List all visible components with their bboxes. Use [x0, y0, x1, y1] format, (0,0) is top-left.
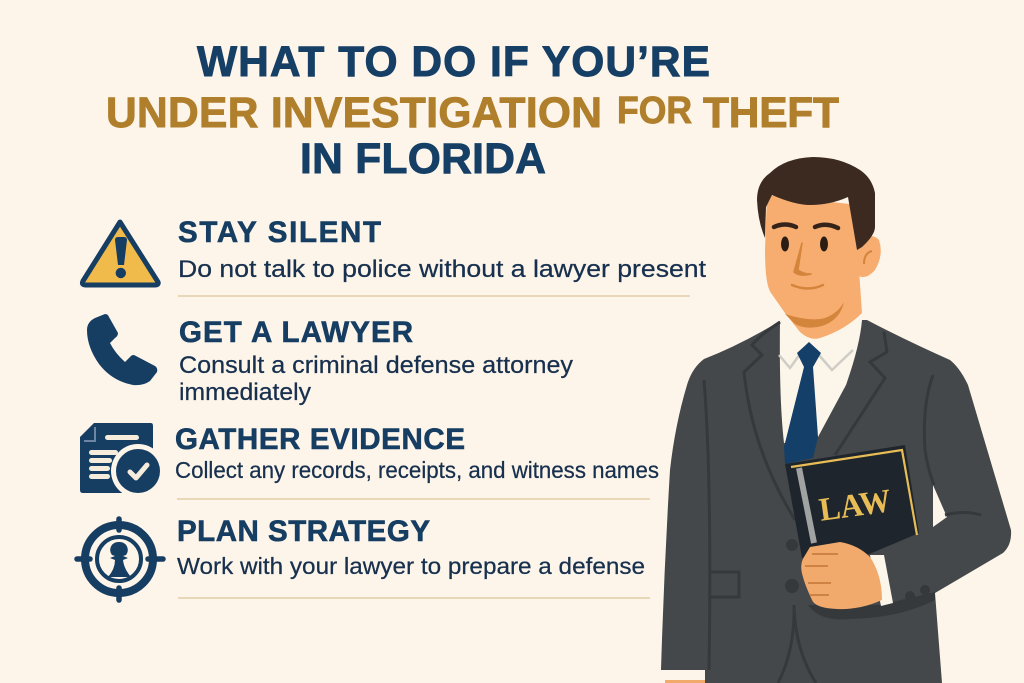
heading: stay silent: STAY SILENT	[178, 216, 381, 249]
icon: exclamation mark	[115, 237, 127, 278]
neck and face	[765, 195, 862, 339]
panel: gather evidence	[80, 423, 659, 498]
arm gap	[933, 485, 947, 527]
chin shadow	[785, 302, 844, 328]
title: THEFT	[703, 90, 839, 137]
panel: plan strategy	[77, 515, 645, 600]
law book: LAW	[817, 483, 893, 529]
shirt collar	[779, 350, 853, 370]
tie	[784, 342, 821, 464]
heading: get a lawyer: GET A LAWYER	[179, 316, 413, 349]
hand shadow	[808, 592, 935, 619]
mouth	[792, 285, 823, 288]
text: plan strategy: Work with your lawyer to prepare a defense	[177, 553, 645, 579]
title: IN FLORIDA	[300, 136, 546, 183]
law book	[785, 445, 919, 558]
text: stay silent: Do not talk to police without a lawyer present	[178, 256, 706, 283]
sleeve buttons	[905, 591, 915, 601]
panel: stay silent	[82, 216, 706, 285]
icon: target with chess pawn	[77, 519, 163, 600]
panel: get a lawyer	[87, 314, 573, 406]
ear	[859, 236, 881, 277]
title: UNDER INVESTIGATION	[106, 90, 602, 137]
illustration: lawyer in suit holding law book	[661, 157, 1011, 683]
text: gather evidence: Collect any records, receipts, and witness names	[175, 457, 659, 483]
title: WHAT TO DO IF YOU’RE	[197, 39, 710, 86]
fingers	[805, 554, 838, 595]
jacket buttons	[786, 539, 798, 551]
text: get a lawyer line 2: immediately	[179, 379, 311, 406]
nose	[794, 243, 811, 275]
shirt	[780, 320, 862, 443]
icon: telephone	[87, 314, 157, 385]
text: get a lawyer: Consult a criminal defense attorney	[179, 352, 573, 379]
shirt cuff	[870, 555, 893, 606]
suit jacket	[661, 320, 1011, 683]
icon: warning triangle	[82, 222, 158, 285]
icon: document with check	[80, 423, 165, 498]
title	[106, 39, 839, 183]
heading: plan strategy: PLAN STRATEGY	[177, 515, 430, 548]
left cuff and hand	[665, 668, 706, 683]
eyes	[781, 236, 789, 252]
heading: gather evidence: GATHER EVIDENCE	[175, 423, 465, 456]
title: FOR	[617, 90, 692, 132]
jacket seam lines	[704, 322, 981, 683]
hair	[757, 157, 875, 250]
hand	[801, 542, 882, 609]
eyebrows	[774, 224, 838, 228]
